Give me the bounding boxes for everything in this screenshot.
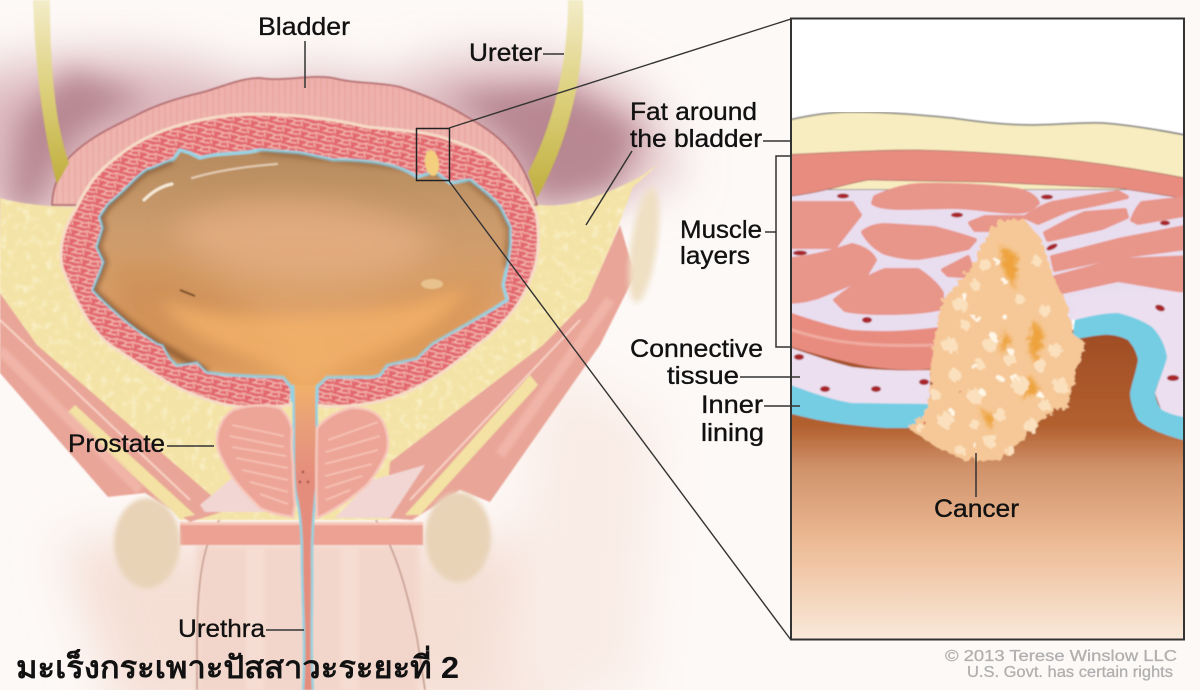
inner lining right (1072, 312, 1183, 442)
label: Connective tissue: Connective (630, 335, 763, 363)
zoom connector lines (449, 19, 791, 640)
label: Inner lining: lining (701, 419, 764, 447)
inner lining left (792, 384, 930, 430)
label: Connective tissue (630, 335, 800, 390)
tissue below lining (780, 330, 1195, 650)
connective tissue lower left (792, 347, 932, 405)
leg tissue below pelvic floor (197, 505, 425, 690)
muscle top band (780, 150, 1195, 200)
panel: pelvic anatomy (0, 0, 665, 690)
copyright credit: U.S. Govt. has certain rights (967, 664, 1173, 681)
lumen highlights (144, 164, 277, 200)
fat around bladder (0, 163, 660, 520)
bladder interior (93, 150, 510, 400)
label: Bladder: Bladder (258, 13, 350, 41)
connective tissue right (1074, 291, 1183, 418)
label: Fat around the bladder: Fat around (630, 98, 757, 126)
panel: magnified inset (792, 112, 1183, 638)
bladder wall cross-section (61, 114, 538, 407)
zoom box (416, 128, 450, 180)
fat layer (780, 112, 1195, 190)
label: Fat around the bladder: the bladder (630, 125, 762, 153)
label: Cancer: Cancer (934, 495, 1019, 523)
copyright credit: © 2013 Terese Winslow LLC (945, 648, 1177, 665)
prostate (217, 405, 388, 518)
pelvic bones (114, 186, 665, 588)
icon: right ureter (528, 0, 583, 198)
connective tissue upper (792, 189, 1183, 332)
title: มะเร็งกระเพาะปัสสาวะระยะที่ 2 (16, 645, 459, 685)
label: Fat around the bladder (586, 98, 792, 225)
muscle layers bracket (776, 156, 791, 347)
muscle bundles (780, 185, 1195, 313)
cancer mass (908, 220, 1085, 460)
background shading (0, 58, 680, 690)
urethra (293, 385, 318, 690)
label: Cancer (934, 453, 1019, 523)
muscle lower band (792, 312, 939, 371)
label: Urethra: Urethra (178, 615, 265, 643)
inset frame (791, 18, 1184, 640)
bladder dome (52, 77, 537, 205)
label: Bladder (258, 13, 350, 88)
icon: small tumour on bladder wall (423, 149, 441, 177)
label: Ureter: Ureter (469, 39, 542, 67)
label: Muscle layers (680, 216, 776, 270)
label: Muscle layers: layers (680, 242, 750, 270)
icon: left ureter (33, 0, 69, 184)
pelvic muscle right (385, 225, 635, 520)
tissue beside prostate (200, 465, 425, 518)
label: Inner lining: Inner (701, 391, 763, 419)
label: Muscle layers: Muscle (680, 216, 762, 244)
label: Inner lining (701, 391, 800, 447)
pelvic floor bar (180, 522, 423, 545)
label: Connective tissue: tissue (667, 362, 739, 390)
lumen marks (180, 279, 443, 296)
label: Prostate: Prostate (68, 430, 165, 458)
label: Urethra (178, 615, 304, 643)
pelvic muscle left (0, 293, 228, 522)
copyright credit (945, 648, 1177, 681)
red cells (793, 194, 1179, 392)
